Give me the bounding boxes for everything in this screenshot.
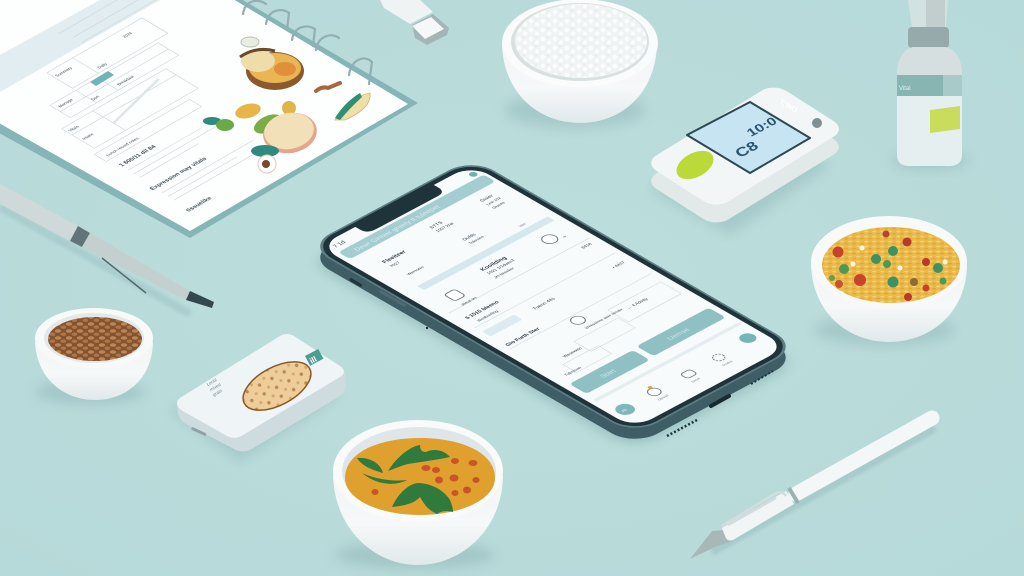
shoulder	[897, 47, 962, 75]
collar	[908, 27, 949, 48]
list text: Weseeein	[561, 346, 584, 358]
bowl body	[811, 265, 967, 342]
nav meals	[641, 385, 670, 401]
rim	[35, 308, 153, 368]
brand label: ill	[308, 355, 318, 366]
nav home: Ab	[620, 408, 629, 413]
list text: • 4437	[611, 260, 627, 269]
bowl body	[502, 45, 657, 123]
inner wall	[511, 3, 649, 81]
list text: Jrs Neseker	[492, 266, 516, 279]
reading	[732, 114, 780, 161]
spiral rings	[243, 1, 372, 84]
usb bar	[380, 0, 433, 24]
save button	[636, 308, 726, 356]
notebook text: Manage	[57, 97, 75, 108]
nav home	[611, 402, 639, 417]
pen tip	[186, 291, 214, 308]
nav log: Sesst	[690, 377, 701, 383]
rice bowl	[502, 0, 658, 128]
notebook text: Summary	[54, 66, 74, 78]
bottle	[892, 0, 968, 170]
notebook text: 2024	[121, 31, 134, 39]
body	[897, 47, 962, 166]
notebook text: Sort	[90, 94, 101, 101]
power button	[812, 118, 822, 128]
circle icon	[568, 314, 588, 326]
charging port	[711, 396, 729, 406]
brand label	[305, 349, 323, 366]
summary row: STTS	[428, 221, 445, 230]
brand: T.WO	[778, 97, 799, 115]
list text: Weakeerling	[475, 309, 499, 322]
nav log	[679, 369, 704, 383]
list text: Tuenn 44s	[531, 297, 558, 311]
soup	[345, 438, 495, 515]
grip	[722, 491, 794, 540]
package text	[206, 376, 225, 397]
smartphone	[307, 158, 799, 451]
illustration: rice plate	[260, 109, 320, 157]
illustration: pizza dish	[240, 37, 304, 90]
usb plug	[412, 17, 444, 39]
summary row: 7027	[388, 261, 402, 268]
notebook text: Vitals	[67, 125, 80, 132]
clip	[722, 492, 786, 526]
cap	[908, 0, 948, 28]
list text: Tulerpoan	[563, 366, 583, 377]
nav profile	[709, 353, 734, 367]
list text: Vas	[517, 222, 527, 228]
bowl body	[333, 476, 503, 565]
nav meals: Upload	[657, 394, 670, 401]
illustration: leaves	[203, 117, 234, 131]
summary row: Fleeiteer	[381, 250, 409, 264]
notebook text	[6, 31, 314, 213]
side	[177, 372, 346, 452]
screen	[319, 165, 787, 428]
notebook page	[0, 0, 408, 231]
soup pieces	[372, 458, 480, 496]
header bar	[338, 175, 496, 259]
illustration: mango	[234, 101, 262, 121]
bezel	[310, 160, 795, 433]
rice	[515, 4, 647, 78]
usb device	[380, 0, 449, 45]
usb shadow body	[412, 14, 449, 45]
summary row	[373, 193, 529, 278]
notebook text: tissuelike	[185, 196, 214, 213]
start button: Start	[599, 369, 618, 379]
inner wall	[342, 427, 496, 515]
lime tag	[930, 106, 960, 133]
shadow	[335, 541, 495, 569]
pen left	[0, 184, 214, 314]
status icons	[467, 171, 479, 178]
notebook text: Daily	[96, 62, 109, 69]
notebook form lines	[0, 0, 343, 201]
illustration: teal leaf	[251, 145, 279, 157]
divider band	[417, 216, 555, 290]
soup bowl	[333, 420, 503, 569]
package text: Lentil	[206, 377, 218, 387]
side	[644, 101, 846, 227]
shadow	[815, 314, 955, 346]
list text: Gio Furth Ster	[504, 327, 543, 347]
port	[191, 427, 207, 436]
illustration: small round	[258, 155, 276, 173]
illustration: green wrap	[335, 93, 370, 120]
ring	[789, 488, 798, 503]
rim	[502, 0, 658, 87]
list text	[403, 213, 700, 379]
status bar text: 7 1d	[332, 240, 348, 249]
yellow rice bowl	[811, 216, 967, 346]
lime button	[672, 145, 718, 185]
clock icon	[538, 233, 561, 245]
shadow	[170, 360, 340, 462]
summary row: Gluerts	[491, 201, 506, 209]
list text: Vreessinne aeer sesaw	[583, 308, 624, 330]
list text: ••	[561, 234, 568, 238]
start button	[569, 350, 650, 394]
label stripe	[897, 75, 962, 96]
phone face	[307, 158, 799, 435]
shadow	[505, 92, 645, 128]
notebook text: Breakfast	[116, 74, 136, 86]
notebook text: Expression may vitals	[149, 157, 209, 191]
list text: 1021 1/1duenT	[485, 258, 517, 275]
speaker grille	[667, 420, 697, 436]
notebook text: Intake	[81, 132, 95, 141]
shadow	[712, 428, 935, 552]
stylus pen	[690, 418, 935, 559]
phone side	[307, 169, 799, 446]
list text: dseutt tes	[460, 296, 478, 306]
illustration: spoon	[316, 83, 340, 91]
summary row: Levi 102	[485, 196, 502, 206]
notebook with meal plan	[0, 0, 418, 238]
pen body	[82, 233, 190, 300]
left icon	[444, 289, 466, 301]
summary row: Oufds	[461, 232, 478, 242]
reading: C8	[732, 139, 762, 161]
top face	[177, 334, 344, 438]
shadow	[35, 380, 145, 404]
nav separator	[593, 322, 742, 402]
glucose meter	[644, 83, 846, 235]
illustration: green leaf	[251, 110, 285, 138]
rim	[333, 420, 503, 522]
save button: Uemse	[666, 327, 692, 341]
package text: grain	[212, 388, 223, 397]
label text: Vital	[899, 86, 911, 92]
list text: 8418	[580, 242, 594, 249]
shadow	[892, 150, 968, 170]
rice	[822, 227, 960, 303]
food image	[235, 352, 319, 420]
pen ring	[70, 226, 90, 247]
basil leaves	[357, 445, 453, 514]
speaker right	[751, 371, 773, 384]
list text: ← 4 Adotty	[625, 297, 650, 310]
illustration: fruit	[282, 101, 296, 115]
notebook blue strip	[0, 0, 160, 92]
nozzle	[926, 0, 945, 28]
side buttons	[349, 278, 428, 329]
notebook teal button	[90, 71, 114, 86]
metal edge	[307, 158, 799, 435]
pen clip	[102, 258, 146, 293]
row lines	[449, 238, 704, 380]
light highlight	[482, 315, 522, 336]
rim	[811, 216, 967, 308]
bowl body	[35, 342, 153, 400]
grains	[48, 317, 142, 361]
summary row: Gisier	[479, 194, 496, 203]
tip	[690, 530, 733, 559]
shadow	[650, 125, 830, 235]
package text: mixed	[209, 382, 222, 392]
phone shadow	[307, 174, 799, 451]
nav profile: Scales	[721, 360, 734, 367]
notebook text: 1 600/11 dil 84	[118, 144, 159, 168]
brown grains bowl	[35, 308, 153, 404]
notebook cover	[0, 0, 418, 238]
top face	[644, 83, 846, 209]
notch	[354, 184, 446, 234]
list text: Kooilding	[479, 256, 509, 272]
pen shadow	[0, 207, 190, 314]
summary row: Wassures	[405, 265, 425, 276]
vegetables	[829, 230, 948, 301]
list text: 6 1515 bleeno	[464, 300, 502, 320]
summary row: Tolersins	[467, 235, 485, 245]
header text: Dewr Ginowr greety tt tuleepet	[353, 205, 442, 253]
reading: 10:0	[743, 114, 780, 139]
notebook text: Lunch record notes	[105, 137, 140, 157]
nav action	[736, 331, 760, 345]
summary row: 1007 k/ar	[434, 221, 456, 233]
body	[796, 418, 932, 494]
pen barrel	[0, 184, 78, 241]
inner wall	[44, 313, 144, 363]
label dark	[897, 75, 943, 96]
screen	[687, 102, 810, 173]
food package	[170, 334, 346, 462]
